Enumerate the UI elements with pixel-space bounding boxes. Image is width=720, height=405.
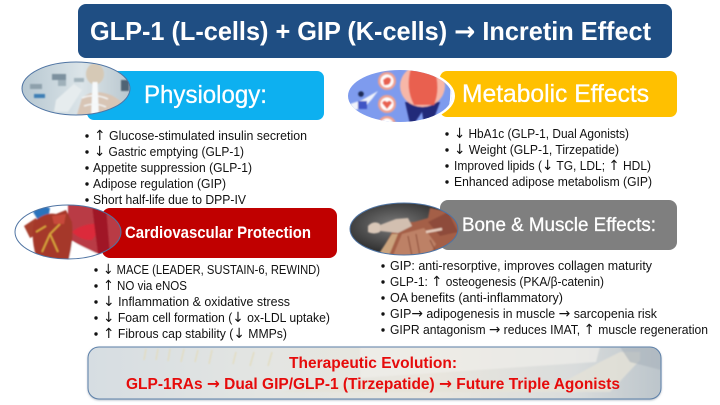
metabolic bullets: ↓ Weight (GLP-1, Tirzepatide) (454, 142, 619, 158)
metabolic bullets: Improved lipids (↓ TG, LDL; ↑ HDL) (454, 158, 651, 174)
icon: human body in laboratory (20, 60, 132, 118)
cardiovascular bullets: ↓ MACE (LEADER, SUSTAIN-6, REWIND) (103, 262, 320, 278)
callout: therapeutic evolution (88, 347, 661, 400)
cardiovascular bullets: ↓ Inflammation & oxidative stress (103, 294, 290, 310)
icon: muscular arm and torso (348, 202, 460, 258)
cardiovascular bullets (94, 262, 330, 342)
callout progression text: GLP-1RAs → Dual GIP/GLP-1 (Tirzepatide) → Future Triple Agonists (126, 374, 620, 393)
icon: heart and artery (14, 204, 122, 262)
cardiovascular bullets: ↑ NO via eNOS (103, 278, 187, 294)
panel: metabolic effects (346, 65, 677, 189)
metabolic bullets (445, 126, 652, 189)
physiology bullets: Short half-life due to DPP-IV (93, 193, 247, 207)
cardiovascular heading bar (102, 208, 337, 258)
title banner: GLP-1 (L-cells) + GIP (K-cells) → Incretin Effect (90, 16, 651, 47)
physiology heading bar (87, 71, 324, 120)
physiology bullets (85, 128, 307, 207)
metabolic bullets: ↓ HbA1c (GLP-1, Dual Agonists) (454, 126, 629, 142)
bone and muscle bullets (381, 259, 708, 338)
bone and muscle heading: Bone & Muscle Effects: (462, 215, 656, 236)
metabolic heading bar (440, 71, 677, 117)
cardiovascular bullets: ↓ Foam cell formation (↓ ox-LDL uptake) (103, 310, 330, 326)
physiology heading: Physiology: (144, 81, 267, 109)
panel: cardiovascular protection (14, 204, 337, 342)
bone and muscle bullets: GLP-1: ↑ osteogenesis (PKA/β-catenin) (390, 274, 604, 290)
icon: weight and organs illustration (348, 70, 455, 122)
cardiovascular bullets: ↑ Fibrous cap stability (↓ MMPs) (103, 326, 287, 342)
title banner (78, 4, 672, 58)
bone and muscle bullets: GIP: anti-resorptive, improves collagen maturity (390, 259, 653, 273)
metabolic bullets: Enhanced adipose metabolism (GIP) (454, 175, 652, 189)
panel: bone and muscle effects (348, 200, 708, 338)
bone and muscle bullets: GIPR antagonism → reduces IMAT, ↑ muscle regeneration (390, 322, 708, 338)
physiology bullets: Appetite suppression (GLP-1) (93, 161, 252, 175)
physiology bullets: Adipose regulation (GIP) (93, 177, 226, 191)
callout heading: Therapeutic Evolution: (289, 355, 457, 372)
bone and muscle bullets: OA benefits (anti-inflammatory) (390, 291, 563, 305)
cardiovascular heading: Cardiovascular Protection (125, 224, 311, 242)
bone and muscle bullets: GIP→ adipogenesis in muscle → sarcopenia risk (390, 306, 658, 322)
physiology bullets: ↓ Gastric emptying (GLP-1) (94, 144, 244, 160)
panel: physiology (20, 60, 324, 207)
physiology bullets: ↑ Glucose-stimulated insulin secretion (94, 128, 307, 144)
bone and muscle heading bar (440, 200, 677, 250)
metabolic heading: Metabolic Effects (462, 80, 649, 108)
